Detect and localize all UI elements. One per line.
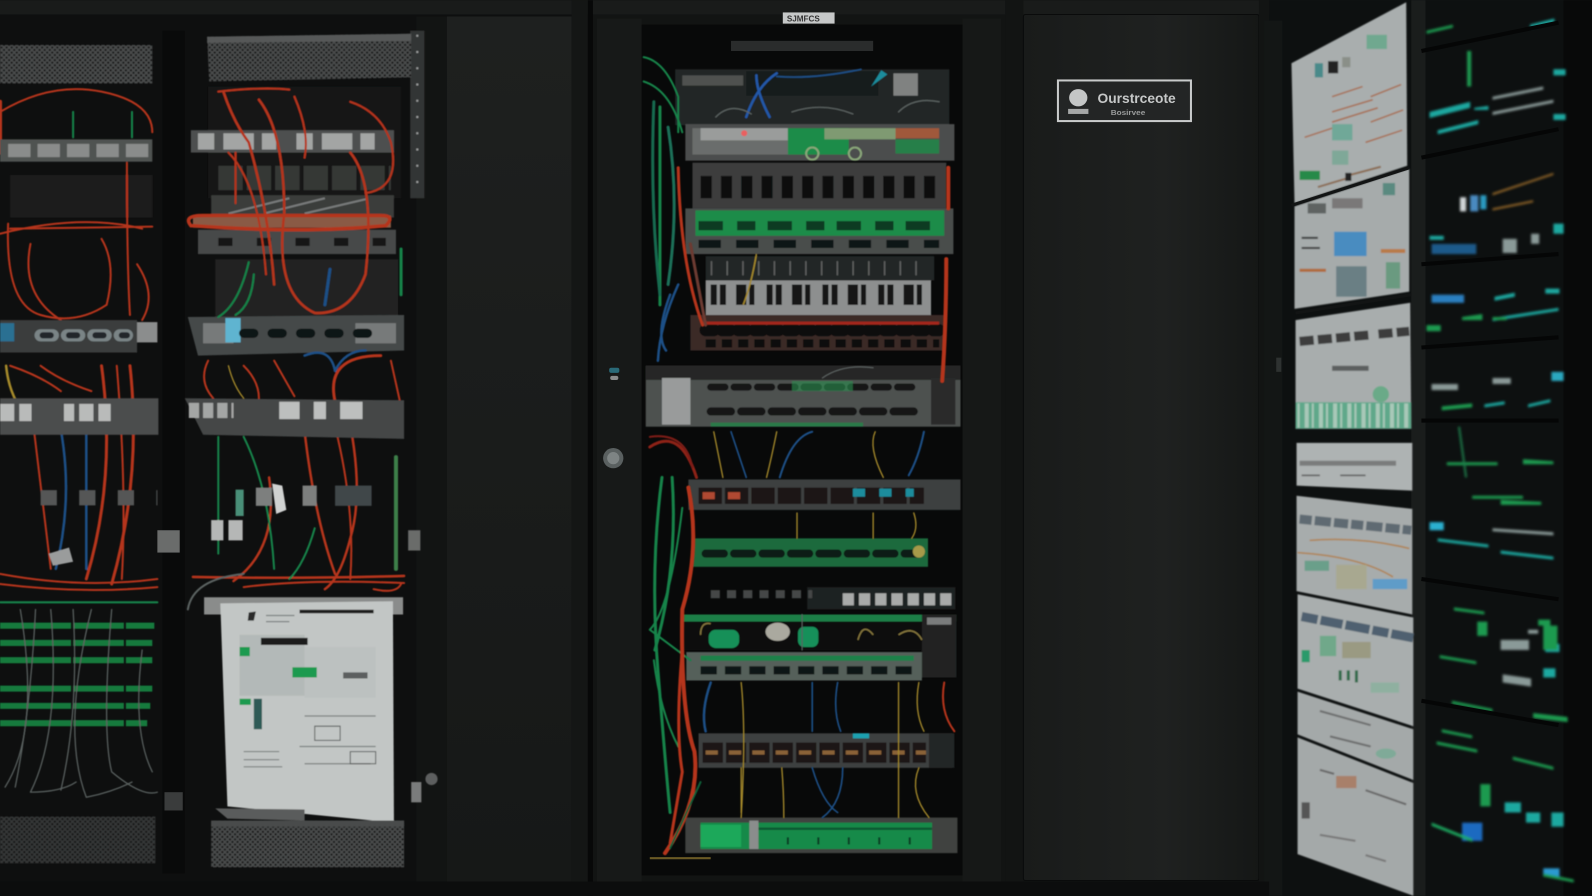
nameplate: Bosirvee [1111,108,1145,117]
sheet 7 [1298,692,1413,780]
top bar above document [204,597,403,615]
top mesh grille [207,34,411,81]
lower brackets [41,490,157,505]
right mounting rail [410,31,424,198]
rack two [185,31,438,867]
bottom plate [215,808,305,821]
status panel [685,124,954,161]
shelf with bundled wires [211,195,394,218]
bottom mesh grille [0,817,155,863]
grey slotted panel [706,254,934,315]
rear panel [208,87,401,198]
document sheet [220,601,394,823]
mid brackets [211,486,372,540]
bottom green panel [685,818,957,853]
sheet 2 [1295,169,1409,309]
upper wiring bay [675,69,949,125]
panel: blank cabinet door [1005,0,1269,896]
panel: centre cabinet [593,12,1005,896]
yellow and blue wires [6,112,132,569]
red wiring [0,89,157,590]
sheet 4 [1297,443,1412,491]
looped cable bay [692,163,946,208]
light terminal strip [0,398,158,435]
sheet 5 [1297,496,1412,615]
top label [783,12,835,24]
shelf with round ports [188,315,404,356]
sheet 8 [1298,737,1413,896]
rack floor bracket [650,857,711,859]
top label: SJMFCS [787,15,820,24]
white connector row [711,587,955,609]
indicator modules, out of focus [1427,19,1574,883]
terminal strip [191,130,394,153]
green panel [692,538,928,567]
strip of terminal blocks [0,139,152,162]
sheet 3 [1296,303,1411,429]
panel: right cabinet with monitoring sheets [1264,0,1592,896]
dark gaps between sheets [1291,168,1411,313]
shelf with round ports [0,320,137,353]
bottom mesh grille [211,821,404,867]
panel: left cabinet [0,0,593,896]
cables in centre rack [644,57,954,853]
sheet 6 [1298,594,1413,726]
left cabinet solid door [447,16,572,882]
red port row [690,315,944,351]
light terminal strip [185,398,404,439]
wide grey switch [646,366,960,427]
nameplate: Ourstrceote [1098,91,1176,106]
top strip [0,0,1592,14]
brown port panel [699,733,954,768]
green patch bands [0,626,154,723]
green and grey panel [686,652,922,681]
rack one, partially visible [0,45,158,863]
green and blue wires [188,249,401,609]
rear dark blocks [10,175,152,218]
top mesh grille [0,45,152,84]
bottom floor shadow [0,882,1269,896]
mixed module [682,615,956,677]
dark port panel [688,479,960,510]
green patch panel [685,208,953,254]
opening [642,25,963,875]
door handle fittings [603,368,623,468]
top bracket [731,41,873,51]
nameplate [1058,80,1191,121]
red wiring [189,88,404,591]
sheet 1 [1291,2,1407,203]
